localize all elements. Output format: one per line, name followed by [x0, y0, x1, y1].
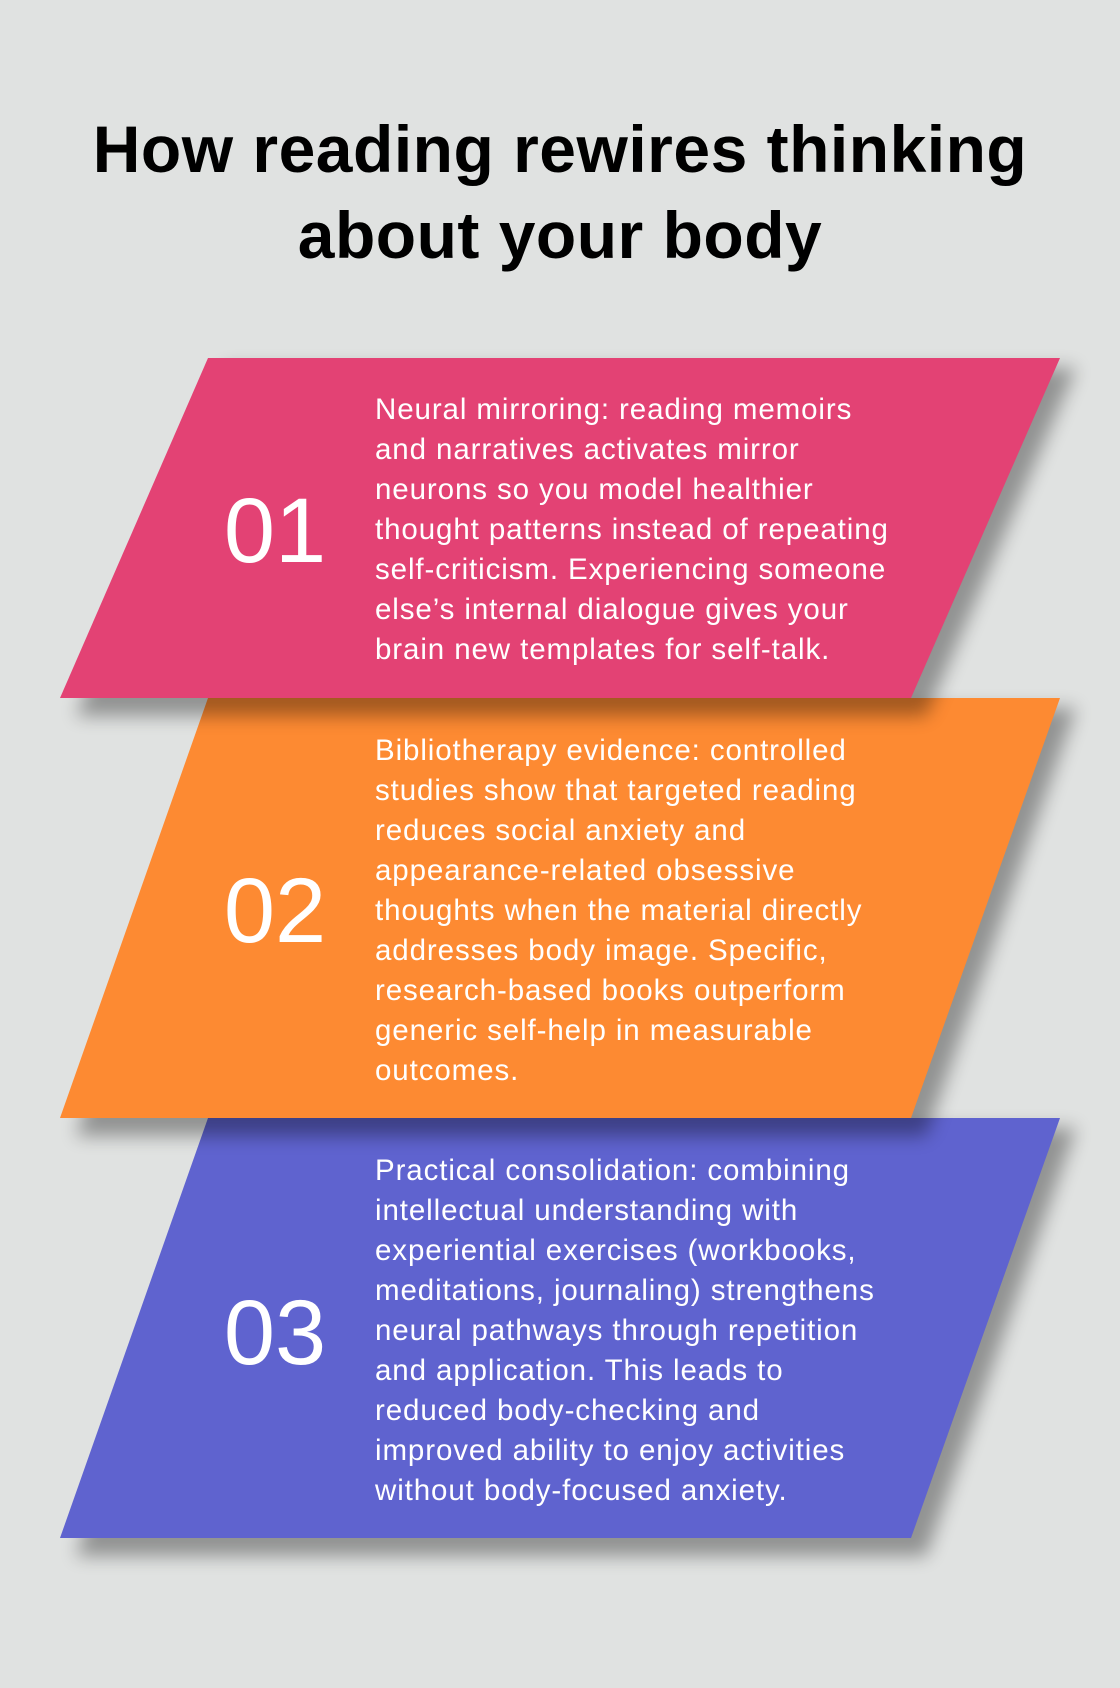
- panel 3: [60, 1118, 1076, 1556]
- text 03: meditations, journaling) strengthens: [375, 1274, 875, 1307]
- text 02: thoughts when the material directly: [375, 894, 862, 927]
- text 03: experiential exercises (workbooks,: [375, 1234, 856, 1267]
- title: [93, 112, 1027, 272]
- text 02: outcomes.: [375, 1054, 519, 1087]
- text 01: brain new templates for self-talk.: [375, 633, 830, 666]
- text 01: [375, 393, 889, 666]
- number 02: 02: [224, 860, 326, 962]
- number 01: 01: [224, 480, 326, 582]
- title: about your body: [298, 198, 822, 272]
- text 02: addresses body image. Specific,: [375, 934, 828, 967]
- text 02: generic self-help in measurable: [375, 1014, 813, 1047]
- text 03: improved ability to enjoy activities: [375, 1434, 845, 1467]
- text 03: Practical consolidation: combining: [375, 1154, 850, 1187]
- text 01: thought patterns instead of repeating: [375, 513, 889, 546]
- text 03: [374, 1154, 875, 1507]
- text 01: else’s internal dialogue gives your: [375, 593, 849, 626]
- text 02: research-based books outperform: [375, 974, 846, 1007]
- text 01: neurons so you model healthier: [375, 473, 814, 506]
- text 02: Bibliotherapy evidence: controlled: [375, 734, 847, 767]
- title: How reading rewires thinking: [93, 112, 1027, 186]
- text 03: intellectual understanding with: [375, 1194, 798, 1227]
- panel 2: [60, 698, 1076, 1136]
- text 02: [375, 734, 862, 1087]
- text 03: neural pathways through repetition: [375, 1314, 858, 1347]
- text 01: Neural mirroring: reading memoirs: [375, 393, 852, 426]
- number 03: 03: [224, 1282, 326, 1384]
- text 01: and narratives activates mirror: [375, 433, 800, 466]
- text 02: studies show that targeted reading: [375, 774, 857, 807]
- text 03: and application. This leads to: [375, 1354, 784, 1387]
- text 03: reduced body-checking and: [375, 1394, 760, 1427]
- text 03: without body-focused anxiety.: [374, 1474, 788, 1507]
- text 01: self-criticism. Experiencing someone: [375, 553, 886, 586]
- panel 1: [60, 358, 1076, 716]
- text 02: appearance-related obsessive: [375, 854, 795, 887]
- text 02: reduces social anxiety and: [375, 814, 746, 847]
